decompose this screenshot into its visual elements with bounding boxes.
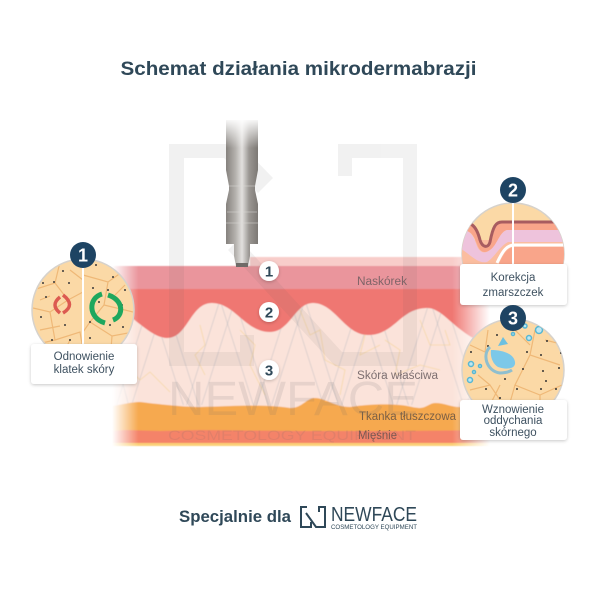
fat layer	[114, 398, 460, 432]
thin bottom layer	[100, 443, 500, 446]
epidermis pale top band	[250, 256, 462, 266]
divider line	[512, 200, 514, 266]
collagen net and fibres	[122, 304, 470, 405]
dead and new cell pigment dots	[40, 264, 126, 341]
salmon skin band	[468, 222, 558, 252]
badge 1	[70, 242, 96, 268]
sponsor line: Specjalnie dla	[179, 508, 292, 526]
layer label: Mięśnie: Mięśnie	[358, 430, 397, 442]
icon: newface logo	[301, 507, 325, 527]
label: Korekcja zmarszczek: zmarszczek	[483, 287, 544, 299]
label: Korekcja zmarszczek	[460, 264, 567, 305]
layer label: Tkanka tłuszczowa: Tkanka tłuszczowa	[359, 411, 457, 423]
pink skin band	[460, 230, 570, 262]
watermark wordmark: NEWFACE	[168, 373, 418, 426]
panel: cell renewal	[31, 260, 135, 344]
label: Wznowienie oddychania skórnego: Wznowienie	[482, 404, 544, 416]
badge 3: 3	[508, 308, 518, 328]
badge 2	[500, 177, 526, 203]
layer label: Skóra właściwa: Skóra właściwa	[357, 370, 439, 382]
watermark wordmark: COSMETOLOGY EQUIPMENT	[168, 427, 417, 443]
badge 3	[500, 305, 526, 331]
cell walls	[470, 330, 562, 400]
microdermabrasion handpiece	[224, 118, 260, 267]
watermark left bracket	[169, 144, 273, 366]
divider line	[82, 262, 84, 346]
watermark logo	[169, 144, 417, 366]
number marker 3 on skin	[259, 360, 279, 380]
newface wordmark: NEWFACE	[331, 504, 417, 526]
number marker 1 on skin	[259, 261, 279, 281]
label: Korekcja zmarszczek: Korekcja	[491, 272, 536, 284]
layer label: Naskórek: Naskórek	[357, 276, 407, 288]
lower salmon band	[499, 247, 564, 264]
icon: pore outline	[486, 347, 512, 373]
handpiece segment lines	[226, 186, 258, 223]
label: Wznowienie oddychania skórnego: oddychania	[484, 415, 543, 427]
label: Odnowienie klatek skóry: Odnowienie	[54, 351, 114, 363]
icon: escaping droplet	[498, 337, 508, 346]
number marker 2 on skin	[259, 302, 279, 322]
oxygen bubbles	[468, 324, 542, 382]
panel: skin respiration	[461, 320, 565, 400]
epidermis layer	[100, 266, 500, 290]
skin cross-section	[100, 257, 500, 446]
label: Wznowienie oddychania skórnego	[460, 400, 567, 440]
lower skin fill	[462, 240, 564, 264]
icon: red rotation arrows	[55, 295, 70, 313]
icon: green rotation arrows	[92, 294, 121, 323]
badge 2: 2	[508, 180, 518, 200]
handpiece top fade	[224, 118, 260, 148]
muscle layer	[100, 430, 500, 444]
label: Wznowienie oddychania skórnego: skórnego	[489, 427, 537, 439]
watermark right bracket	[228, 144, 417, 366]
dermis layer	[118, 302, 472, 408]
white line	[497, 245, 570, 263]
number marker 3 on skin: 3	[265, 362, 273, 380]
panel: wrinkle correction	[461, 202, 565, 306]
newface wordmark: COSMETOLOGY EQUIPMENT	[331, 524, 417, 531]
dark skin surface line	[470, 220, 554, 248]
icon: blue pore	[491, 350, 515, 369]
pigment dots	[470, 334, 562, 399]
badge 1: 1	[78, 246, 88, 266]
number marker 2 on skin: 2	[265, 304, 273, 322]
cell walls	[33, 266, 133, 344]
red upper dermis layer	[130, 288, 488, 339]
label: Odnowienie klatek skóry: klatek skóry	[54, 364, 115, 376]
label: Odnowienie klatek skóry	[31, 344, 137, 384]
number marker 1 on skin: 1	[265, 264, 273, 280]
handpiece tip	[236, 263, 248, 267]
title: Schemat działania mikrodermabrazji	[120, 59, 476, 80]
